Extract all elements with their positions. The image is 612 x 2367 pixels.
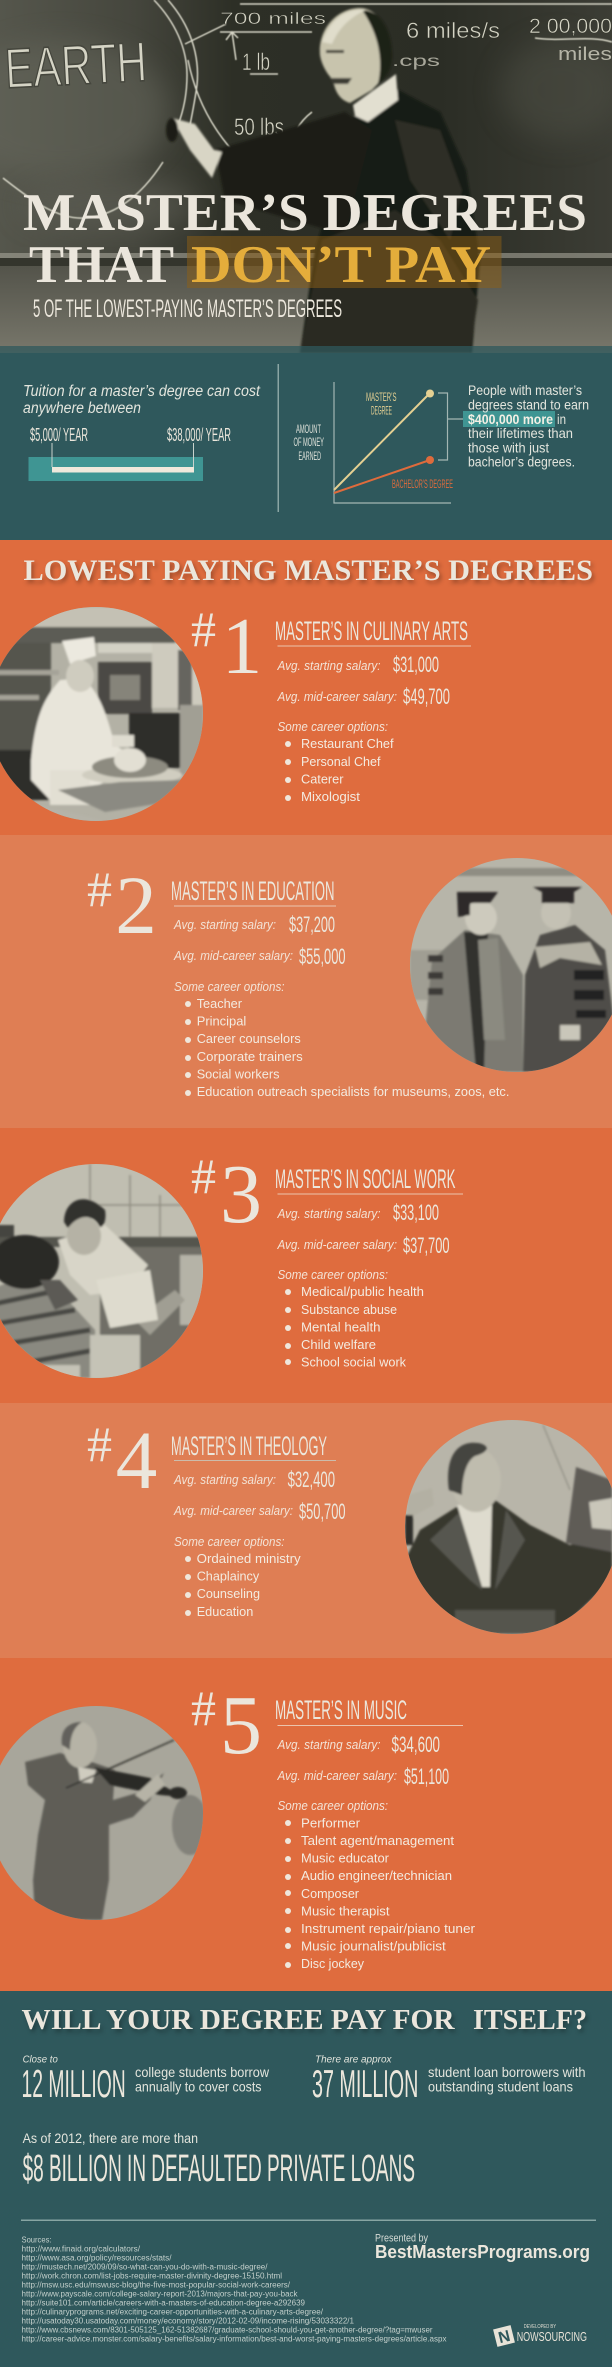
line chart: master's vs bachelor's earnings	[294, 382, 463, 503]
rank number	[191, 1148, 262, 1241]
title highlight box	[187, 236, 502, 288]
degree #2: education: MASTER’S IN EDUCATION	[171, 876, 334, 906]
stat: 12 million: Close to	[23, 2054, 58, 2066]
salaries: Avg. starting salary:	[277, 659, 380, 673]
salaries: $37,700	[403, 1233, 450, 1258]
stat: 37 million: There are approx	[315, 2054, 392, 2066]
sources: http://work.chron.com/list-jobs-require-master-divinity-degree-15150.html	[22, 2272, 282, 2281]
header photo: professor at chalkboard: 50 lbs	[234, 114, 284, 141]
career options: Music educator	[301, 1850, 390, 1866]
header photo: professor at chalkboard	[0, 0, 612, 353]
header: photo and title	[0, 0, 612, 353]
salaries: $55,000	[299, 944, 346, 969]
title	[23, 184, 587, 294]
sources: http://www.cbsnews.com/8301-505125_162-51382687/graduate-school-should-you-get-another-degree/?tag=mwuser	[22, 2326, 433, 2335]
stat: 37 million	[312, 2054, 586, 2106]
rank number	[191, 601, 262, 691]
sources: http://culinaryprograms.net/exciting-career-opportunities-with-a-culinary-arts-degree/	[22, 2308, 324, 2317]
salaries: $33,100	[393, 1200, 439, 1225]
sources: http://suite101.com/article/careers-with-a-masters-of-education-degree-a292639	[22, 2299, 306, 2308]
career options	[278, 720, 394, 804]
title: DON’T PAY	[191, 236, 491, 294]
stat: 8 billion	[23, 2130, 415, 2190]
earnings callout: degrees stand to earn	[468, 396, 589, 412]
salaries: $51,100	[404, 1764, 449, 1789]
sources: http://career-advice.monster.com/salary-benefits/salary-information/best-and-worst-paying-masters-degrees/article.aspx	[22, 2335, 446, 2344]
stat: 12 million: 12 MILLION	[22, 2063, 126, 2106]
line chart: master's vs bachelor's earnings: OF MONEY	[294, 435, 324, 449]
career options: Substance abuse	[301, 1302, 397, 1317]
presented by: BestMastersPrograms.org	[375, 2242, 590, 2262]
logo: Nowsourcing: N	[497, 2328, 512, 2347]
salaries: $49,700	[403, 684, 450, 709]
degree #5: music	[0, 1679, 476, 1971]
salaries: Avg. starting salary:	[277, 1207, 380, 1221]
earnings callout: their lifetimes than	[468, 425, 573, 441]
career options: Restaurant Chef	[301, 736, 394, 751]
sources: http://www.finaid.org/calculators/	[22, 2245, 141, 2254]
stat: 12 million: college students borrow	[135, 2064, 270, 2080]
career options: Social workers	[197, 1066, 280, 1082]
line chart: master's vs bachelor's earnings: AMOUNT	[296, 422, 321, 436]
career options: Instrument repair/piano tuner	[301, 1921, 476, 1936]
career options: Medical/public health	[301, 1284, 424, 1299]
logo: Nowsourcing	[493, 2324, 587, 2348]
career options: Some career options:	[174, 1535, 284, 1549]
panel: lowest paying degrees	[0, 540, 612, 1991]
header photo: professor at chalkboard: 2 00,000	[529, 15, 612, 38]
presented by: Presented by	[375, 2233, 428, 2245]
earnings callout: People with master’s	[468, 382, 582, 398]
degree #1: culinary arts	[0, 601, 471, 821]
title: MASTER’S DEGREES	[23, 184, 587, 242]
salaries: Avg. mid-career salary:	[173, 949, 293, 963]
stat: 37 million: outstanding student loans	[428, 2079, 573, 2095]
tuition text: anywhere between	[23, 400, 141, 417]
career options: Performer	[301, 1816, 361, 1830]
career options: Corporate trainers	[197, 1049, 303, 1064]
sources: Sources:	[22, 2236, 52, 2245]
salaries: Avg. mid-career salary:	[277, 1769, 397, 1783]
presented by	[375, 2233, 590, 2262]
salaries: Avg. starting salary:	[277, 1738, 380, 1752]
sources	[22, 2236, 446, 2344]
earnings callout: bachelor’s degrees.	[468, 454, 575, 470]
tuition range bar	[28, 425, 231, 481]
stat: 37 million: student loan borrowers with	[428, 2064, 586, 2080]
photo: children working	[0, 1164, 203, 1380]
rank number: #	[87, 861, 112, 917]
teal strip overlapping photo	[0, 346, 612, 353]
salaries: $37,200	[289, 912, 335, 937]
heading: WILL YOUR DEGREE PAY FOR	[22, 2004, 456, 2036]
salaries: Avg. starting salary:	[173, 918, 276, 932]
rank number: 4	[116, 1414, 157, 1506]
career options	[174, 1535, 301, 1619]
rank number: #	[87, 1416, 112, 1472]
rank number: 1	[222, 601, 262, 691]
career options: Some career options:	[278, 720, 388, 734]
career options	[174, 980, 509, 1099]
career options: Chaplaincy	[197, 1568, 260, 1584]
career options: Mental health	[301, 1320, 380, 1334]
line chart: master's vs bachelor's earnings: BACHELOR’S DEGREE	[392, 477, 453, 491]
career options: Disc jockey	[301, 1956, 364, 1971]
salaries: $34,600	[392, 1732, 440, 1757]
salaries	[277, 1732, 449, 1789]
earnings callout: $400,000 more	[468, 411, 553, 427]
career options: Music therapist	[301, 1904, 390, 1918]
degree #4: theology: MASTER’S IN THEOLOGY	[171, 1431, 327, 1461]
tuition text	[23, 383, 261, 417]
career options: Mixologist	[301, 789, 360, 804]
rank number: #	[191, 1680, 216, 1736]
tuition range bar: $5,000/ YEAR	[30, 425, 88, 445]
rank number: 3	[220, 1148, 262, 1241]
career options: Music journalist/publicist	[301, 1938, 446, 1954]
stat: 12 million: annually to cover costs	[135, 2079, 262, 2095]
career options: Caterer	[301, 772, 344, 786]
earnings callout: in	[557, 411, 566, 427]
heading: LOWEST PAYING MASTER’S DEGREES	[24, 554, 593, 587]
salaries	[277, 1200, 450, 1258]
photo: graduates in gowns	[410, 858, 612, 1072]
line chart: master's vs bachelor's earnings: DEGREE	[371, 404, 392, 418]
photo: preacher with book	[405, 1420, 612, 1634]
tuition text: Tuition for a master’s degree can cost	[23, 383, 261, 400]
salaries: Avg. mid-career salary:	[277, 1238, 397, 1252]
career options: Talent agent/management	[301, 1833, 454, 1848]
career options: Child welfare	[301, 1337, 376, 1352]
stat: 12 million	[22, 2054, 270, 2106]
rank number: #	[191, 601, 216, 657]
header photo: professor at chalkboard: 700 miles	[220, 9, 326, 28]
sources: http://msw.usc.edu/mswusc-blog/the-five-most-popular-social-work-careers/	[22, 2281, 291, 2290]
photo: chef	[0, 607, 203, 821]
title: THAT	[29, 236, 174, 294]
career options: Composer	[301, 1886, 360, 1901]
career options: Some career options:	[278, 1799, 388, 1813]
career options: Some career options:	[278, 1268, 388, 1282]
rank number	[87, 859, 157, 951]
heading: ITSELF?	[473, 2004, 587, 2036]
rank number	[191, 1679, 262, 1772]
career options: Personal Chef	[301, 754, 381, 769]
sources: http://www.payscale.com/college-salary-report-2013/majors-that-pay-you-back	[22, 2290, 298, 2299]
salaries: Avg. mid-career salary:	[173, 1504, 293, 1518]
logo: Nowsourcing: DEVELOPED BY	[524, 2324, 557, 2330]
salaries: $32,400	[288, 1467, 335, 1492]
salaries: $31,000	[393, 652, 439, 677]
stat: 8 billion: As of 2012, there are more than	[23, 2130, 198, 2146]
earnings callout	[463, 382, 589, 470]
sources: http://www.asa.org/policy/resources/stats/	[22, 2254, 172, 2263]
career options: Teacher	[197, 996, 243, 1011]
salaries	[277, 652, 450, 709]
earnings callout: those with just	[468, 440, 549, 456]
career options	[278, 1268, 424, 1370]
header photo: professor at chalkboard: 1 lb	[242, 49, 270, 76]
panel: will your degree pay for itself	[0, 1991, 612, 2367]
header photo: professor at chalkboard: Hy	[300, 124, 334, 144]
career options: Some career options:	[174, 980, 284, 994]
career options	[278, 1799, 476, 1971]
line chart: master's vs bachelor's earnings: MASTER’S	[366, 390, 396, 404]
career options: Principal	[197, 1014, 246, 1029]
photo: violinist	[0, 1706, 208, 1920]
salaries	[173, 912, 346, 969]
career options: School social work	[301, 1354, 406, 1370]
stat: 37 million: 37 MILLION	[312, 2063, 418, 2106]
degree #4: theology	[87, 1414, 612, 1634]
header photo: professor at chalkboard: 6 miles/s	[406, 18, 500, 43]
degree #2: education	[87, 858, 612, 1099]
rank number: 5	[220, 1679, 262, 1772]
header photo: professor at chalkboard: EARTH	[3, 30, 148, 100]
header photo: professor at chalkboard: miles	[558, 44, 612, 64]
career options: Career counselors	[197, 1031, 301, 1046]
rank number	[87, 1414, 157, 1506]
tuition range bar: $38,000/ YEAR	[167, 425, 231, 445]
salaries: Avg. starting salary:	[173, 1473, 276, 1487]
career options: Education	[197, 1604, 253, 1619]
salaries: Avg. mid-career salary:	[277, 690, 397, 704]
line chart: master's vs bachelor's earnings: EARNED	[298, 449, 321, 463]
header photo: professor at chalkboard: .cps	[392, 53, 440, 70]
sources: http://mustech.net/2009/09/so-what-can-you-do-with-a-music-degree/	[22, 2263, 268, 2272]
degree #3: social work	[0, 1148, 463, 1380]
degree name: MASTER’S IN MUSIC	[275, 1695, 407, 1725]
subtitle: 5 OF THE LOWEST-PAYING MASTER’S DEGREES	[33, 295, 342, 323]
salaries	[173, 1467, 346, 1524]
career options: Counseling	[197, 1586, 260, 1601]
career options: Audio engineer/technician	[301, 1868, 452, 1883]
panel: tuition and earnings	[0, 353, 612, 540]
career options: Education outreach specialists for museums, zoos, etc.	[197, 1084, 509, 1099]
rank number: 2	[115, 859, 157, 951]
rank number: #	[191, 1148, 216, 1204]
career options: Ordained ministry	[197, 1551, 301, 1566]
sources: http://usatoday30.usatoday.com/money/economy/story/2012-02-09/income-rising/53033322/1	[22, 2317, 355, 2326]
salaries: $50,700	[299, 1499, 346, 1524]
